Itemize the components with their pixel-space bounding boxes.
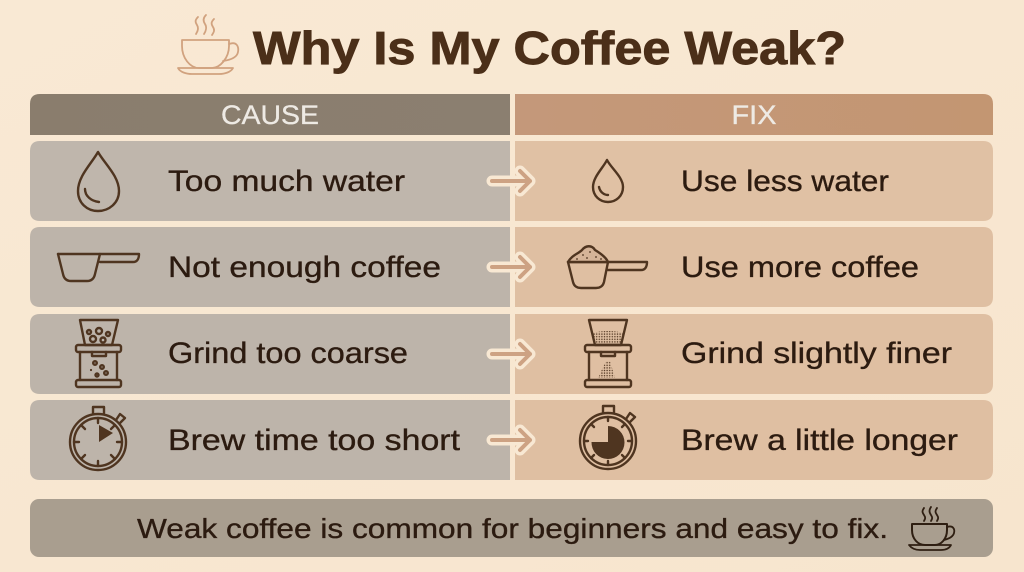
panel: row 2 cause [30,227,510,307]
icon: stopwatch short time [70,407,126,470]
panel: footer note [30,499,993,557]
arrow: row 2 [492,257,530,277]
arrow: row 4 [492,430,530,450]
text: brew time too short: Brew time too short [168,424,460,457]
text: not enough coffee: Not enough coffee [168,251,441,284]
text: brew a little longer: Brew a little longer [681,424,958,457]
icon: empty scoop [58,254,139,281]
panel: row 2 fix [515,227,993,307]
icon: footer coffee cup [909,507,954,550]
text: grind too coarse: Grind too coarse [168,337,408,370]
text: too much water: Too much water [168,165,405,198]
text: use less water: Use less water [681,165,889,198]
arrow: row 1 [492,171,530,191]
panel: row 4 cause [30,400,510,480]
arrow: row 3 [492,344,530,364]
panel: row 1 cause [30,141,510,221]
panel: fix header: FIX [732,100,776,130]
panel: row 1 fix [515,141,993,221]
icon: grinder with coarse beans [76,320,121,387]
panel: fix header [515,94,993,135]
icon: large water drop [78,152,119,211]
title: Why Is My Coffee Weak? [253,22,846,74]
icon: stopwatch longer time [580,406,636,469]
icon: grinder with fine grounds [585,320,631,387]
panel: cause header [30,94,510,135]
panel: row 3 cause [30,314,510,394]
icon: full scoop [568,246,647,288]
panel: row 4 fix [515,400,993,480]
title icon: coffee cup [178,15,238,74]
panel: cause header: CAUSE [221,100,319,130]
icon: small water drop [593,160,623,202]
panel: row 3 fix [515,314,993,394]
text: grind slightly finer: Grind slightly finer [681,337,952,370]
text: use more coffee: Use more coffee [681,251,919,284]
text: footer message: Weak coffee is common for beginners and easy to fix. [137,513,888,544]
